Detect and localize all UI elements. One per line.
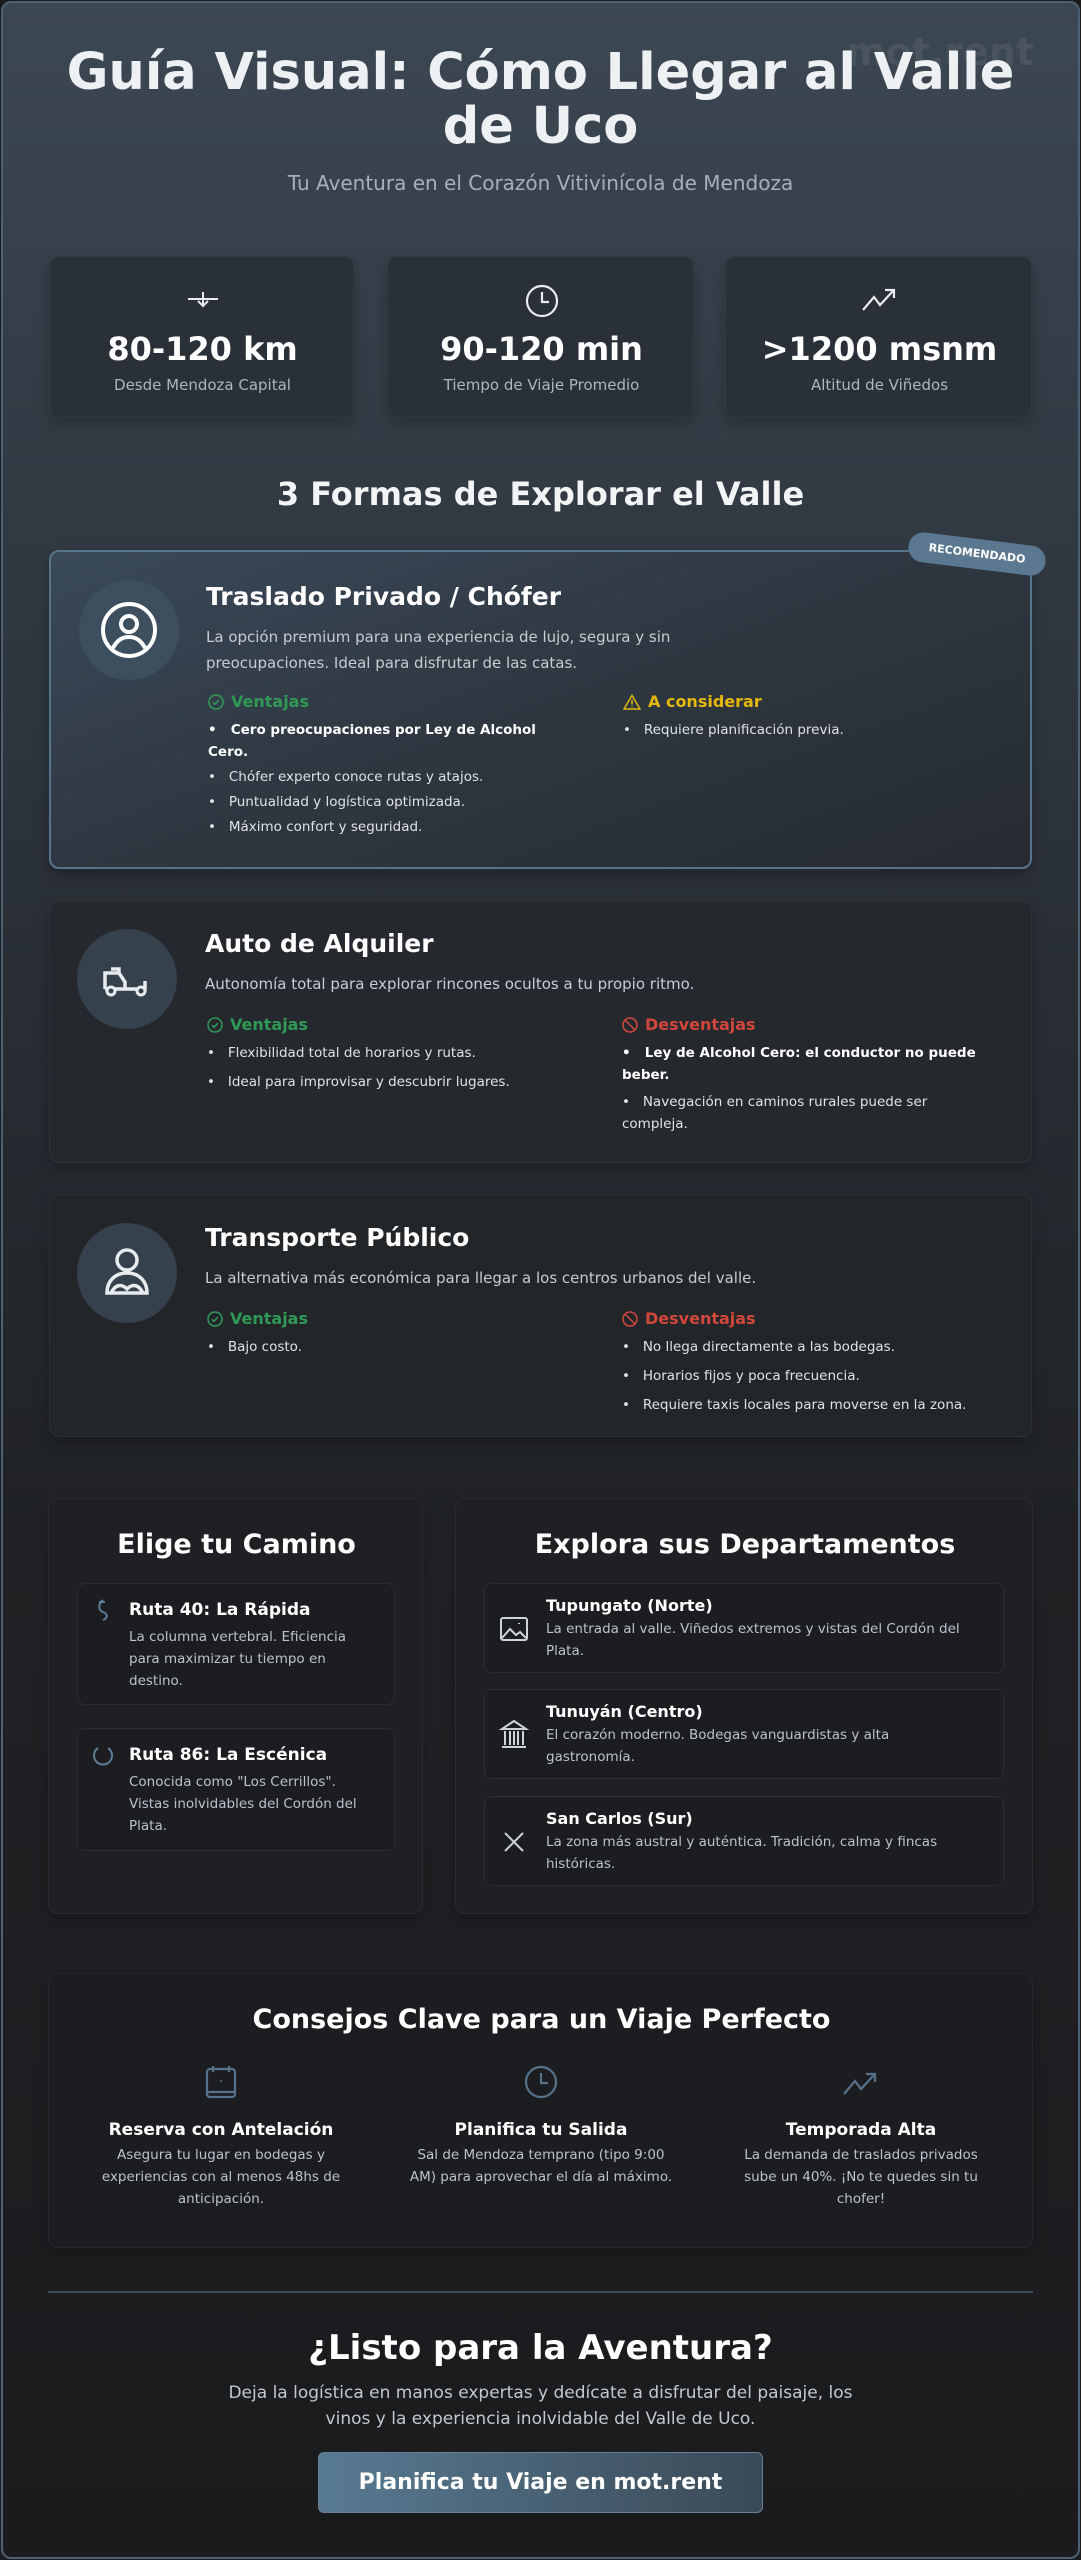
cons — [622, 1015, 976, 1132]
card title: Transporte Público — [205, 1223, 469, 1252]
heading: Explora sus Departamentos — [535, 1529, 955, 1560]
pros: Ventajas — [231, 692, 309, 711]
pros — [207, 1015, 510, 1090]
description: La opción premium para una experiencia de lujo, segura y sin preocupaciones. Ideal para disfrutar de las catas. — [206, 628, 670, 672]
route 86: Ruta 86: La Escénica — [129, 1745, 327, 1765]
San Carlos: San Carlos (Sur) — [546, 1809, 693, 1828]
label: Altitud de Viñedos — [811, 376, 948, 394]
pros: • Chófer experto conoce rutas y atajos. — [208, 769, 483, 785]
pros: Ventajas — [230, 1309, 308, 1328]
route 40: La columna vertebral. Eficiencia para maximizar tu tiempo en destino. — [129, 1629, 346, 1689]
route 86 — [77, 1728, 395, 1851]
CTA button: Planifica tu Viaje en mot.rent — [359, 2470, 722, 2495]
title — [67, 43, 1014, 156]
tip: departure: Planifica tu Salida — [455, 2120, 627, 2140]
panel: departments — [455, 1498, 1033, 1914]
panel: tips — [48, 1973, 1033, 2248]
tip: departure: Sal de Mendoza temprano (tipo 9:00 AM) para aprovechar el día al máximo. — [410, 2147, 672, 2185]
Tupungato — [484, 1583, 1004, 1673]
description: La alternativa más económica para llegar a los centros urbanos del valle. — [205, 1269, 756, 1287]
route 40: Ruta 40: La Rápida — [129, 1600, 311, 1620]
subtitle: Tu Aventura en el Corazón Vitivinícola de Mendoza — [288, 171, 793, 195]
value: 90-120 min — [440, 330, 643, 368]
icon: clock — [526, 284, 558, 318]
value: >1200 msnm — [762, 330, 997, 368]
pros: • Ideal para improvisar y descubrir lugares. — [207, 1074, 510, 1090]
tip: high season: La demanda de traslados privados sube un 40%. ¡No te quedes sin tu chofer! — [744, 2147, 978, 2207]
pros: • Puntualidad y logística optimizada. — [208, 794, 465, 810]
tip: reserve: Reserva con Antelación — [109, 2120, 333, 2140]
stat: time — [387, 256, 694, 418]
card title: Auto de Alquiler — [205, 929, 434, 958]
tip: reserve: Asegura tu lugar en bodegas y experiencias con al menos 48hs de anticipación. — [102, 2147, 340, 2207]
pros: • Flexibilidad total de horarios y rutas. — [207, 1045, 476, 1061]
cons: Desventajas — [645, 1309, 756, 1328]
label: Tiempo de Viaje Promedio — [444, 376, 639, 394]
CTA heading: ¿Listo para la Aventura? — [308, 2328, 773, 2368]
cons: • No llega directamente a las bodegas. — [622, 1339, 895, 1355]
panel: routes — [48, 1498, 423, 1914]
San Carlos: La zona más austral y auténtica. Tradición, calma y fincas históricas. — [546, 1834, 937, 1872]
pros — [208, 692, 536, 835]
pros: • Bajo costo. — [207, 1339, 302, 1355]
panel: public transport — [49, 1194, 1032, 1437]
card title: Traslado Privado / Chófer — [206, 582, 561, 611]
considerations: • Requiere planificación previa. — [623, 722, 844, 738]
cons: • Requiere taxis locales para moverse en la zona. — [622, 1397, 966, 1413]
section heading: 3 Formas de Explorar el Valle — [277, 475, 804, 513]
cons: Desventajas — [645, 1015, 756, 1034]
Tupungato: Tupungato (Norte) — [546, 1596, 713, 1615]
pros: Ventajas — [230, 1015, 308, 1034]
route 40 — [77, 1583, 395, 1705]
badge: recommended — [907, 531, 1047, 577]
tip: departure — [410, 2066, 672, 2185]
watermark: mot.rent — [846, 30, 1034, 74]
Tunuyan: Tunuyán (Centro) — [546, 1702, 703, 1721]
Tunuyan: El corazón moderno. Bodegas vanguardistas y alta gastronomía. — [546, 1727, 889, 1765]
CTA button — [318, 2452, 763, 2513]
pros: • Máximo confort y seguridad. — [208, 819, 422, 835]
icon: car — [77, 929, 177, 1029]
tip: reserve — [102, 2066, 340, 2207]
title: Guía Visual: Cómo Llegar al Valle — [67, 43, 1014, 102]
cons: • Navegación en caminos rurales puede ser compleja. — [622, 1094, 927, 1132]
badge: recommended: RECOMENDADO — [928, 541, 1026, 566]
stat: altitude — [725, 256, 1032, 418]
cons — [622, 1309, 966, 1413]
value: 80-120 km — [107, 330, 298, 368]
label: Desde Mendoza Capital — [114, 376, 291, 394]
tip: high season: Temporada Alta — [786, 2120, 936, 2140]
Tupungato: La entrada al valle. Viñedos extremos y vistas del Cordón del Plata. — [546, 1621, 960, 1659]
considerations: A considerar — [648, 692, 762, 711]
description: Autonomía total para explorar rincones ocultos a tu propio ritmo. — [205, 975, 694, 993]
heading: Consejos Clave para un Viaje Perfecto — [253, 2004, 830, 2035]
panel: rental car — [49, 900, 1032, 1163]
tip: high season — [744, 2072, 978, 2207]
icon: person — [79, 580, 179, 680]
icon: trend — [862, 288, 896, 311]
heading: Elige tu Camino — [117, 1529, 356, 1560]
CTA text: Deja la logística en manos expertas y dedícate a disfrutar del paisaje, los vinos y la experiencia inolvidable del Valle de Uco. — [228, 2383, 853, 2429]
cons: • Ley de Alcohol Cero: el conductor no puede beber. — [622, 1045, 976, 1083]
icon: road — [188, 292, 218, 308]
Tunuyan — [484, 1689, 1004, 1779]
pros: • Cero preocupaciones por Ley de Alcohol Cero. — [208, 722, 536, 760]
panel: private transfer — [49, 550, 1032, 869]
San Carlos — [484, 1796, 1004, 1886]
cons: • Horarios fijos y poca frecuencia. — [622, 1368, 860, 1384]
stat: distance — [49, 256, 354, 418]
pros — [207, 1309, 308, 1355]
considerations — [623, 692, 844, 738]
title: de Uco — [443, 97, 638, 156]
route 86: Conocida como "Los Cerrillos". Vistas inolvidables del Cordón del Plata. — [129, 1774, 357, 1834]
icon: person — [77, 1223, 177, 1323]
